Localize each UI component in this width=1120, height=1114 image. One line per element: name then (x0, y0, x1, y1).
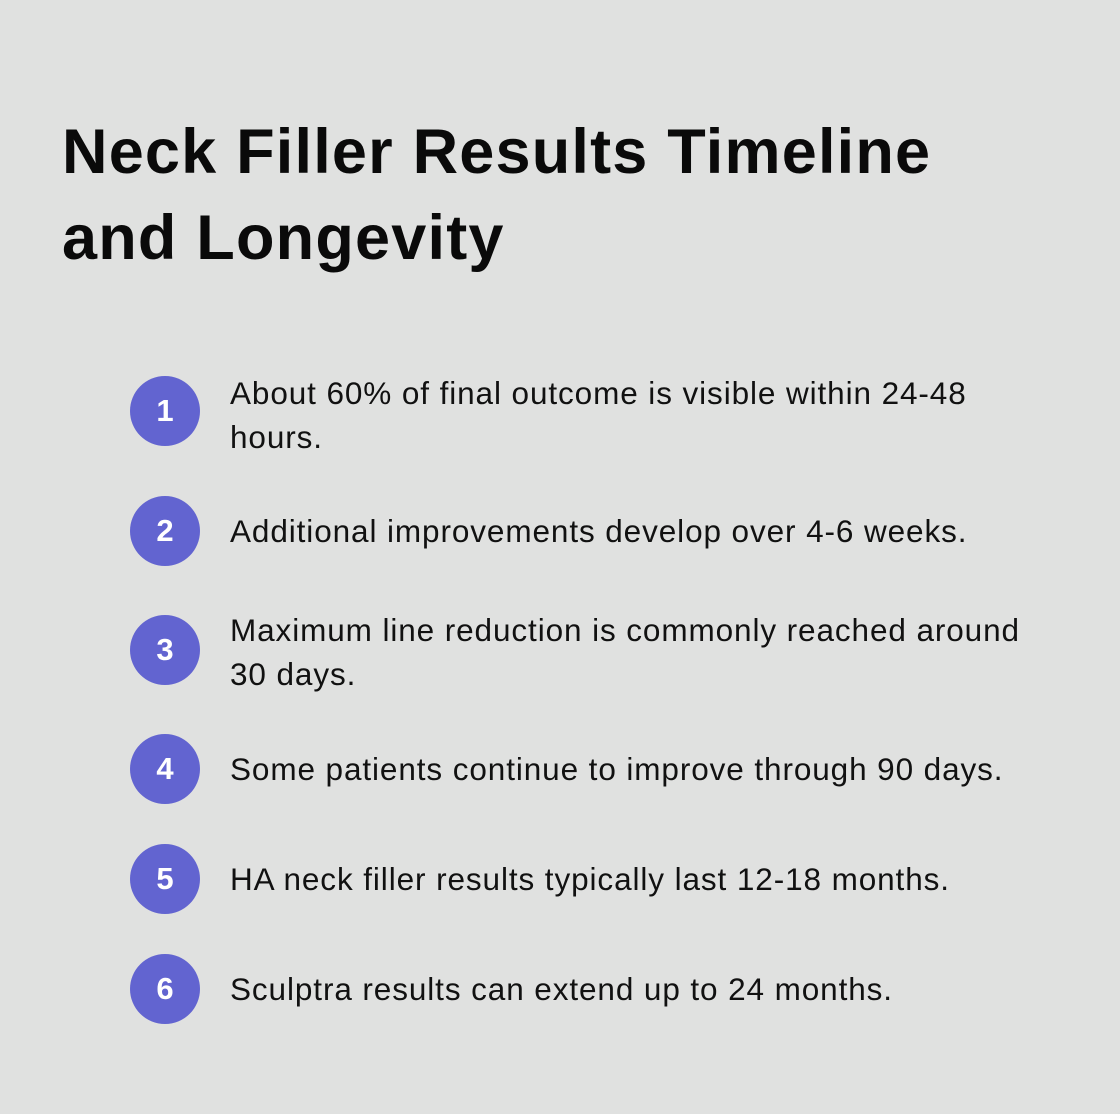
item 1: About 60% of final outcome is visible within 24-48 (230, 375, 967, 411)
item 5 (130, 844, 950, 914)
item 1 (130, 375, 967, 455)
item 1: hours. (230, 419, 323, 455)
item 2: 2 (156, 513, 174, 548)
item 4: 4 (156, 751, 174, 786)
item 3: 30 days. (230, 656, 356, 692)
item 6 (130, 954, 893, 1024)
item 6: Sculptra results can extend up to 24 months. (230, 971, 893, 1007)
item 6: 6 (156, 971, 174, 1006)
item 2: Additional improvements develop over 4-6 weeks. (230, 513, 967, 549)
item 1: 1 (156, 393, 174, 428)
item 3: Maximum line reduction is commonly reached around (230, 612, 1020, 648)
title: and Longevity (62, 203, 505, 273)
title (62, 117, 931, 273)
item 3 (130, 612, 1020, 692)
item 3: 3 (156, 632, 174, 667)
item 4: Some patients continue to improve through 90 days. (230, 751, 1003, 787)
title: Neck Filler Results Timeline (62, 117, 931, 187)
item 2 (130, 496, 967, 566)
item 4 (130, 734, 1003, 804)
item 5: 5 (156, 861, 174, 896)
item 5: HA neck filler results typically last 12-18 months. (230, 861, 950, 897)
